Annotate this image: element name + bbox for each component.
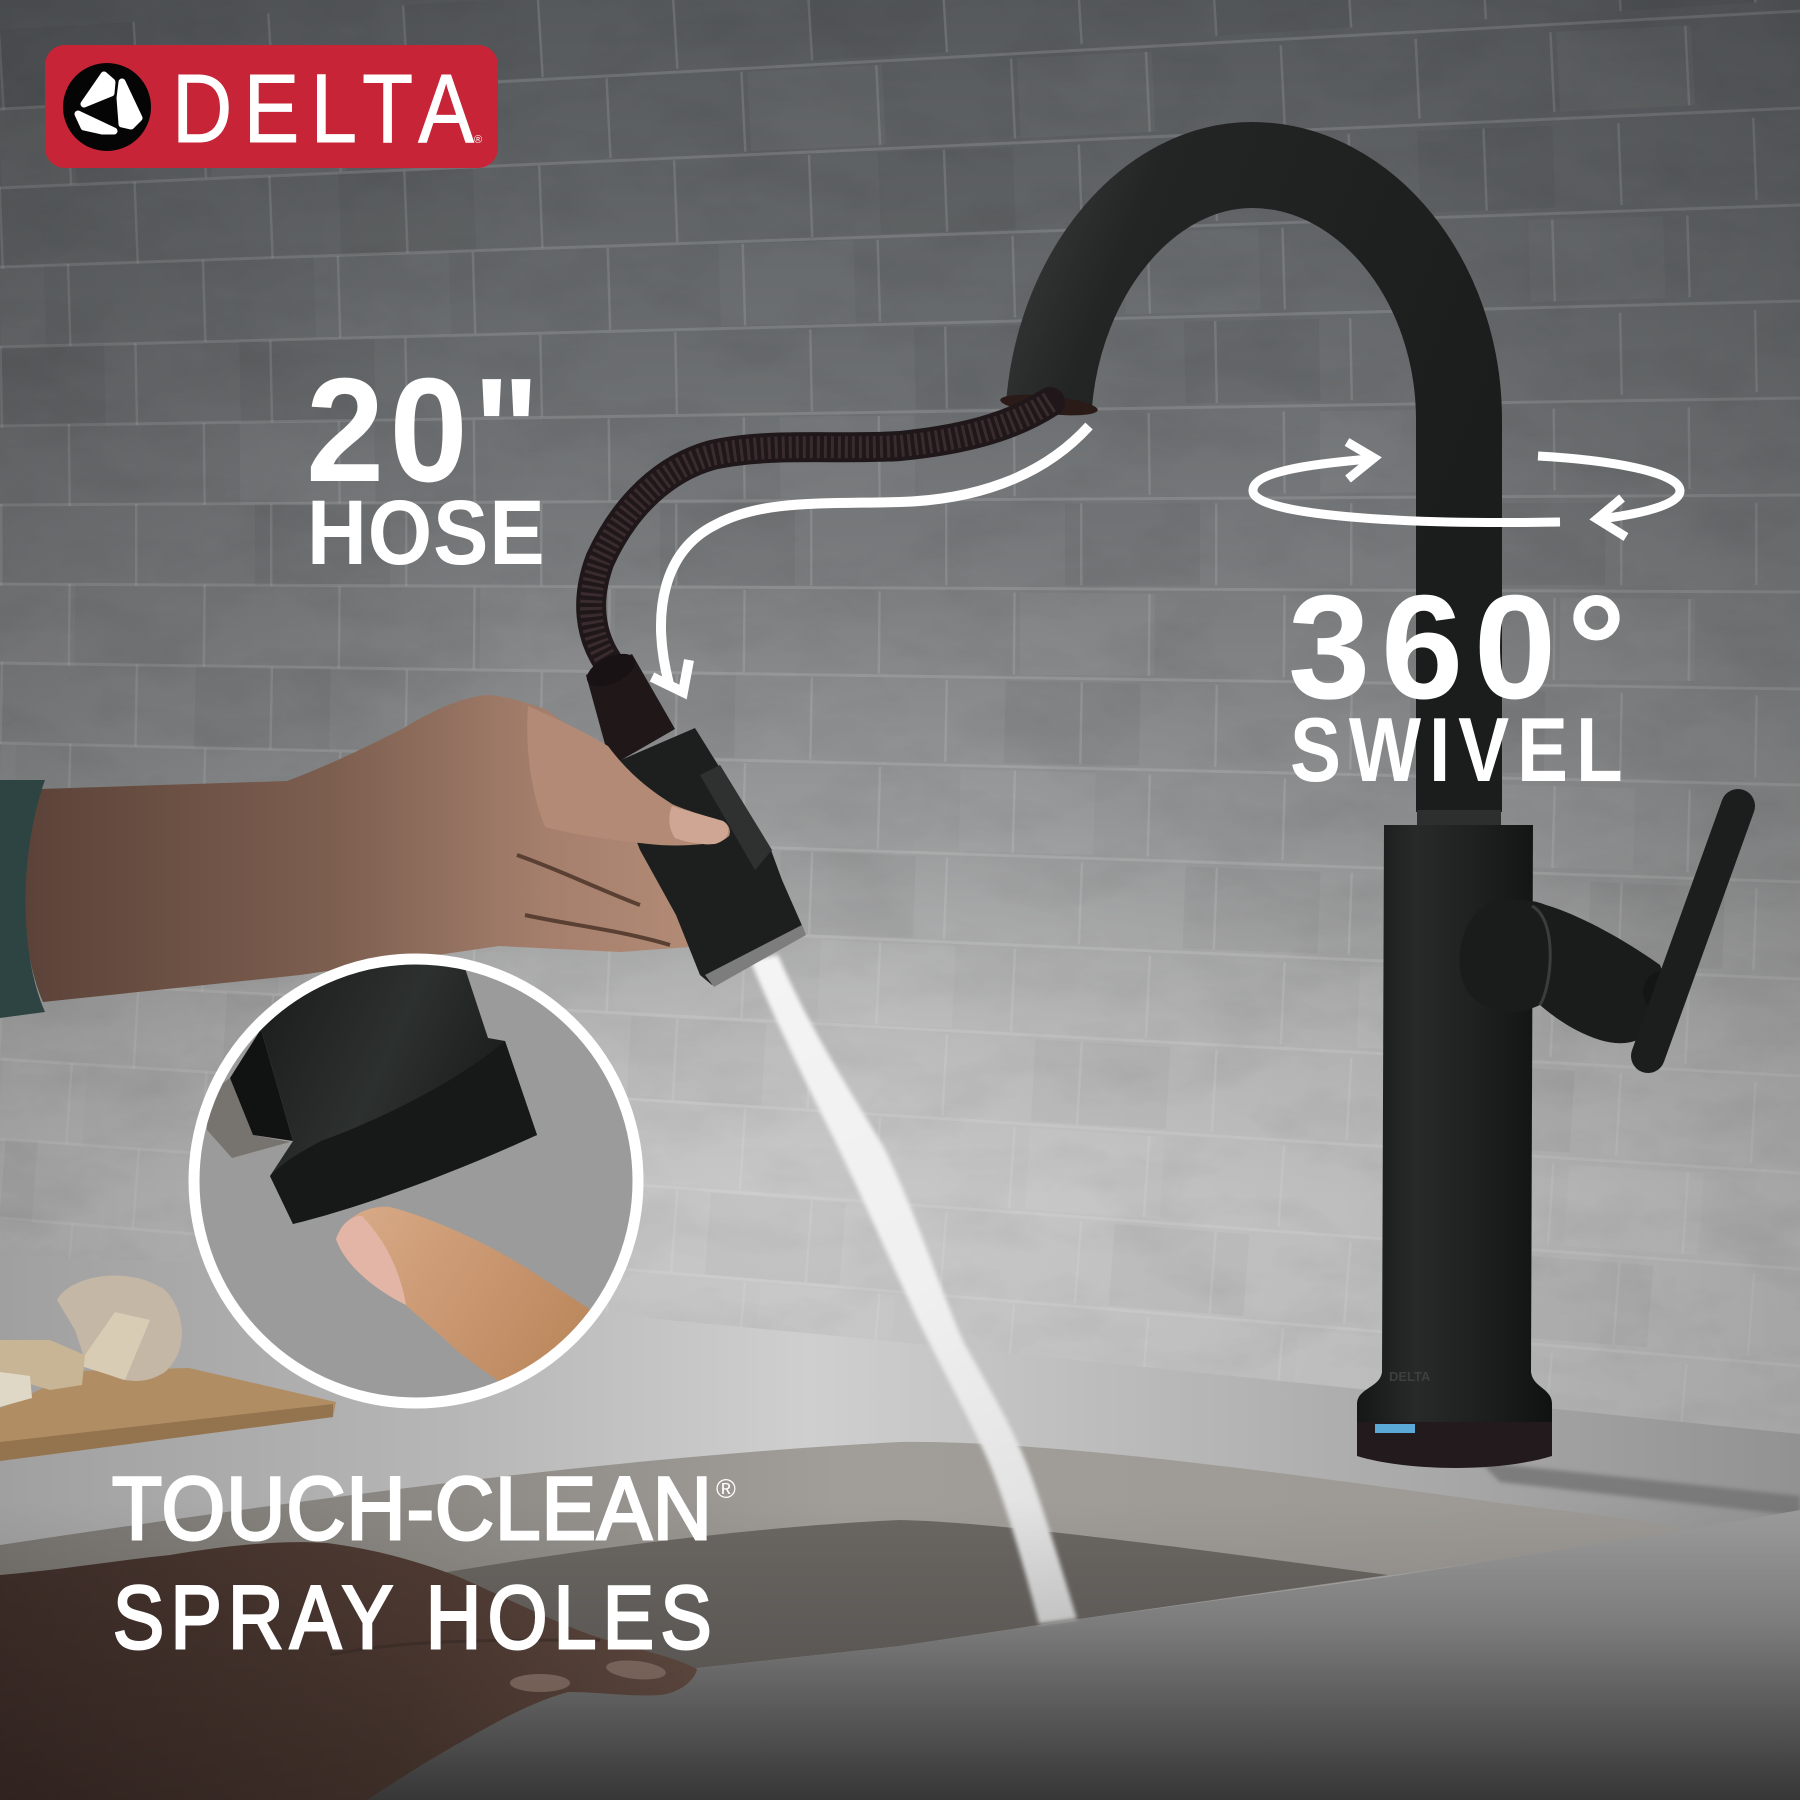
faucet body — [1357, 825, 1552, 1422]
water stream — [750, 955, 1077, 1624]
mushrooms — [0, 1276, 182, 1407]
faucet shadow on counter — [1480, 1462, 1800, 1516]
heading: 20 inch: 20" — [306, 347, 540, 513]
registered mark: ® — [474, 134, 482, 146]
sink lip — [0, 1442, 1681, 1780]
stem ring — [1417, 810, 1501, 826]
registered mark: ® — [716, 1474, 736, 1504]
faucet — [999, 165, 1738, 1468]
zoomed trigger panel — [230, 1029, 293, 1141]
heading: hose: HOSE — [307, 481, 545, 584]
thumb button — [700, 765, 772, 870]
swivel callout — [1288, 565, 1626, 800]
lower hand on counter — [0, 1542, 697, 1800]
metal trigger detail — [207, 1078, 290, 1158]
wordmark: DELTA — [172, 55, 474, 163]
heading: spray holes: SPRAY HOLES — [113, 1568, 712, 1667]
arrow: hose reach — [652, 426, 1089, 692]
lever — [1648, 806, 1738, 1056]
zoomed spray head — [261, 950, 537, 1224]
cutting board — [0, 1276, 336, 1461]
raised arm and hand — [0, 695, 690, 1018]
bottom vignette — [0, 1500, 1800, 1800]
thumbnail — [669, 806, 728, 844]
thumb over head — [527, 706, 730, 846]
neck — [586, 654, 675, 766]
sleeve — [0, 780, 45, 1018]
spout mouth — [999, 391, 1099, 419]
logo mark — [63, 63, 151, 151]
logo: Delta badge — [45, 45, 498, 168]
touch-clean callout — [112, 1460, 736, 1667]
faucet spout — [1049, 165, 1459, 812]
front counter — [0, 1510, 1800, 1800]
indicator light — [1375, 1424, 1415, 1433]
heading: 360 degrees: 360° — [1288, 565, 1626, 730]
sink basin — [400, 1520, 1388, 1710]
heading: swivel: SWIVEL — [1290, 699, 1623, 800]
base ring — [1357, 1422, 1552, 1468]
countertop — [0, 1256, 1800, 1800]
arrow: swivel rotation — [1253, 442, 1680, 537]
spray face — [705, 925, 806, 987]
hose callout — [306, 347, 545, 584]
handle knob — [1460, 900, 1687, 1043]
zoomed finger — [336, 1206, 590, 1381]
head — [607, 728, 804, 985]
zoom callout: touch-clean spray holes — [194, 950, 638, 1403]
body logo: DELTA — [1389, 1369, 1431, 1384]
fingernail — [336, 1216, 406, 1305]
pull-down hose — [591, 402, 1050, 662]
heading: touch-clean: TOUCH-CLEAN — [112, 1460, 712, 1559]
finger creases — [517, 855, 670, 945]
spray head — [527, 647, 806, 987]
